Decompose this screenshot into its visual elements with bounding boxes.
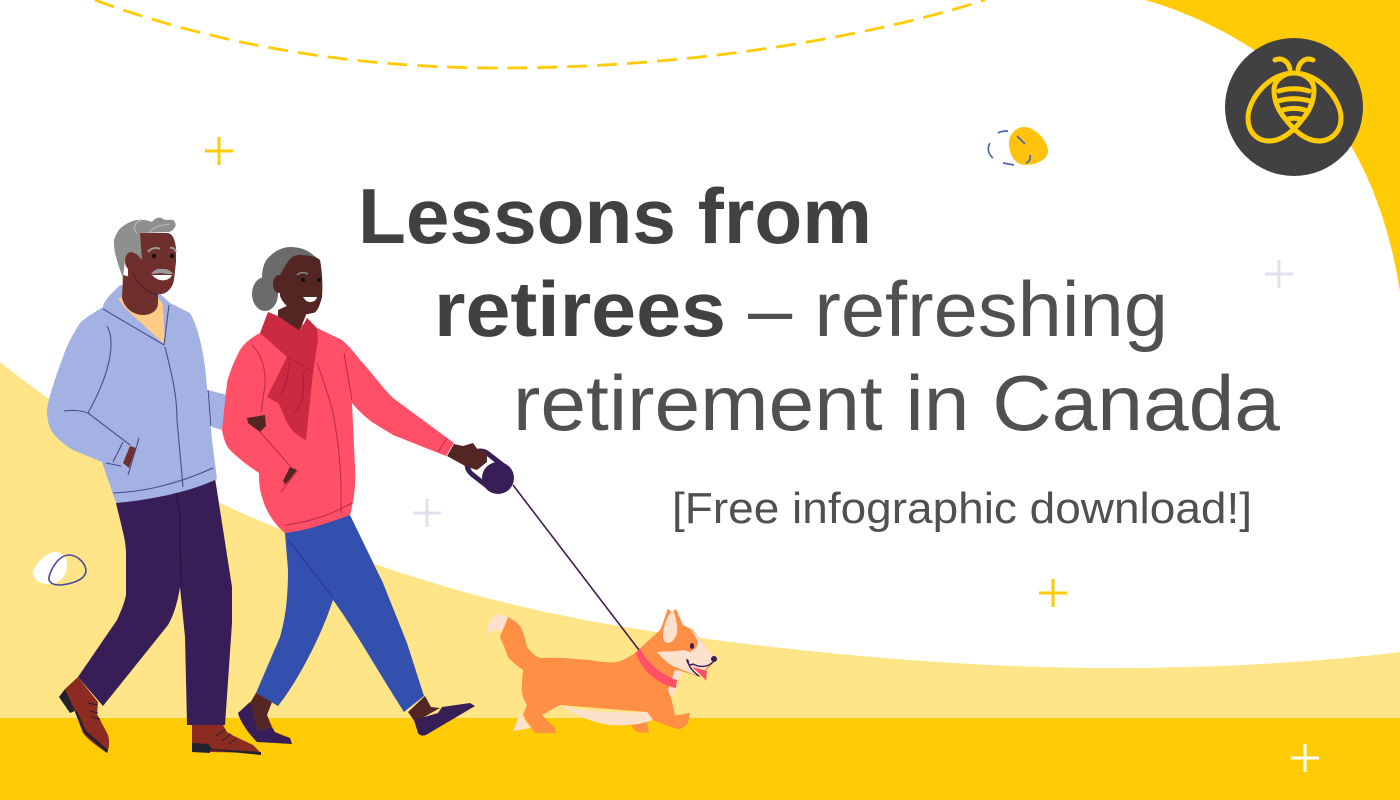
corgi tongue <box>692 667 707 681</box>
title: Lessons from <box>358 172 872 260</box>
corgi collar <box>636 648 677 688</box>
man hair highlight <box>134 220 170 233</box>
woman jacket <box>222 318 454 533</box>
leash cord <box>513 485 639 650</box>
man neck <box>122 275 158 315</box>
corgi eye <box>690 643 694 649</box>
man hoodie seams <box>64 305 213 493</box>
illustration: man walking <box>47 218 261 755</box>
woman smile <box>303 297 317 302</box>
logo: bee badge <box>1225 38 1363 176</box>
background: top right yellow corner <box>1145 0 1400 292</box>
corgi nose <box>711 656 717 662</box>
woman hand holding leash <box>447 443 487 470</box>
corgi tail tip <box>487 615 508 635</box>
corgi chest <box>668 670 683 698</box>
corgi face mask <box>657 629 717 676</box>
woman hand in pocket <box>283 467 297 484</box>
man hoodie <box>47 285 217 503</box>
man right shoe laces <box>216 730 236 744</box>
dashed arc at top <box>95 0 985 68</box>
woman eyes <box>297 273 321 282</box>
plus icon: yellow lower right <box>1039 579 1067 607</box>
woman scarf <box>260 312 318 440</box>
man eyebrows and eyes <box>148 248 176 258</box>
woman jacket seams <box>252 345 447 525</box>
corgi ear <box>663 610 677 643</box>
man right shoe <box>192 725 261 753</box>
plus icon: yellow top left <box>205 137 233 165</box>
subtitle: [Free infographic download!] <box>672 484 1252 533</box>
man left shoe laces <box>88 703 100 719</box>
corgi body <box>500 609 717 733</box>
woman trousers <box>256 515 424 712</box>
title: – refreshing <box>748 265 1168 353</box>
woman face <box>280 255 322 315</box>
woman back foot <box>250 693 272 730</box>
man ear <box>125 252 137 270</box>
man jaw line <box>133 273 158 295</box>
woman front foot <box>408 696 440 722</box>
plus icon: pale right <box>1265 260 1293 288</box>
corgi belly <box>560 705 653 725</box>
decorative egg: white with outline <box>33 552 86 585</box>
man hand in pocket <box>123 446 136 468</box>
illustration: corgi <box>487 609 717 733</box>
woman hair and bun <box>252 247 317 311</box>
plus icon: pale centre <box>413 499 441 527</box>
man face <box>128 233 176 294</box>
man trousers <box>78 478 232 725</box>
decorative egg: yellow with dashed outline <box>988 127 1048 165</box>
corgi far leg <box>628 722 649 733</box>
man trouser crease <box>176 490 181 585</box>
plus icon: white on ground <box>1291 744 1319 772</box>
corgi back cream leg <box>513 713 531 731</box>
woman neck <box>278 300 306 332</box>
ground band <box>0 718 1400 800</box>
title: retirees <box>434 265 726 353</box>
leash handle <box>480 462 514 494</box>
corgi mouth <box>687 659 713 676</box>
background: pale yellow hill <box>0 362 1400 720</box>
title <box>358 172 1281 447</box>
man far arm <box>208 390 227 430</box>
man t-shirt <box>118 295 165 345</box>
man smile and moustache <box>151 269 173 280</box>
illustration: woman walking <box>222 247 487 744</box>
man left shoe <box>65 677 109 753</box>
title: retirement in Canada <box>513 359 1281 447</box>
man hair <box>114 218 176 278</box>
woman hand on arm <box>247 415 266 432</box>
